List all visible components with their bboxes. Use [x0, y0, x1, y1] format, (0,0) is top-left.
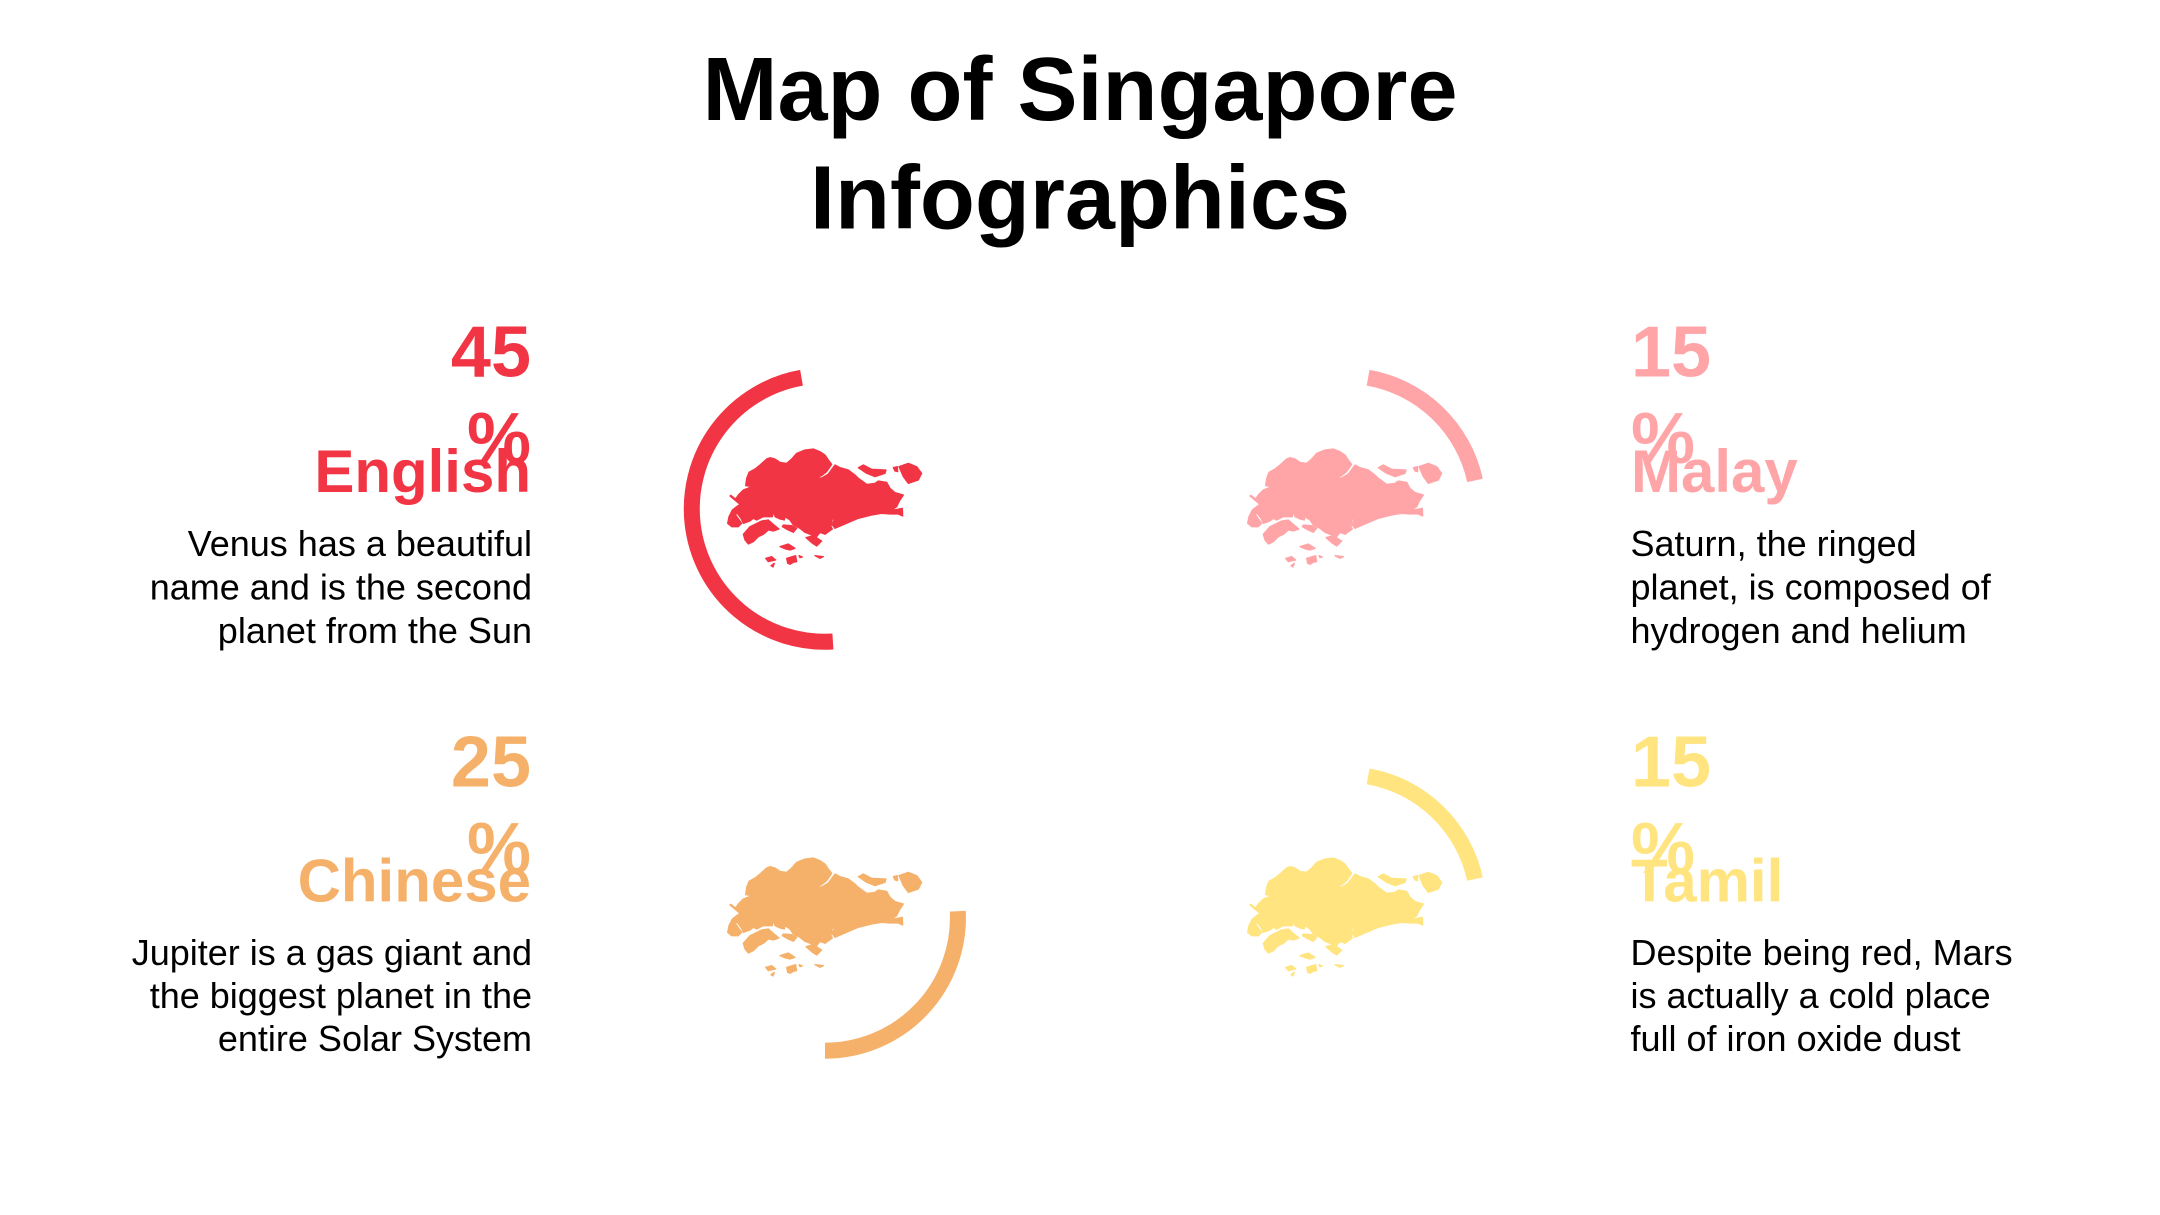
text block: English description: planet from the Sun	[218, 610, 532, 651]
text block: Tamil description	[1630, 932, 2013, 1059]
text block: English description	[150, 523, 532, 651]
text block: Malay description	[1630, 523, 1992, 651]
percentage: 45%	[451, 312, 531, 479]
text block: Chinese description	[132, 932, 532, 1059]
text block: Malay description: hydrogen and helium	[1630, 610, 1967, 651]
title	[702, 40, 1458, 248]
arc: 45 percent	[692, 378, 833, 642]
panel: Chinese	[132, 722, 958, 1059]
text block: English description: Venus has a beautiful	[188, 523, 532, 564]
arc: 15 percent Tamil	[1368, 776, 1475, 879]
heading: English: English	[314, 438, 531, 505]
panel: English	[150, 312, 922, 651]
heading: Malay: Malay	[1631, 438, 1798, 505]
arc: 15 percent Malay	[1368, 378, 1475, 480]
heading: Chinese: Chinese	[298, 848, 531, 914]
text block: Tamil description: full of iron oxide dust	[1630, 1018, 1961, 1059]
text block: English description: name and is the second	[150, 566, 532, 608]
text block: Malay description: Saturn, the ringed	[1630, 523, 1917, 564]
text block: Chinese description: the biggest planet in the	[150, 975, 532, 1016]
text block: Chinese description: entire Solar System	[218, 1018, 532, 1059]
percentage: 15% Malay	[1631, 312, 1711, 479]
text block: Tamil description: Despite being red, Mars	[1630, 932, 2013, 973]
map: Singapore pink	[1248, 449, 1442, 567]
percentage: 25%: %	[467, 809, 531, 889]
percentage: 25%: 25	[451, 722, 531, 802]
text block: Tamil description: is actually a cold place	[1630, 975, 1991, 1016]
heading: Tamil: Tamil	[1631, 848, 1783, 914]
percentage: 15% Malay: %	[1631, 399, 1695, 479]
title: Infographics	[810, 148, 1350, 248]
map: Singapore orange	[728, 858, 922, 976]
title: Map of Singapore	[702, 40, 1458, 140]
percentage: 15% Malay: 15	[1631, 312, 1711, 392]
percentage: 15% Tamil: %	[1631, 809, 1695, 889]
panel: Tamil	[1248, 722, 2013, 1059]
percentage: 45%: 45	[451, 312, 531, 392]
panel: Malay	[1248, 312, 1992, 651]
arc: 25 percent	[825, 911, 958, 1051]
percentage: 25%	[451, 722, 531, 889]
text block: Malay description: planet, is composed of	[1630, 566, 1992, 608]
map: Singapore red	[728, 449, 922, 567]
percentage: 15% Tamil: 15	[1631, 722, 1711, 802]
percentage: 45%: %	[467, 399, 531, 479]
text block: Chinese description: Jupiter is a gas giant and	[132, 932, 532, 973]
map: Singapore yellow	[1248, 858, 1442, 976]
percentage: 15% Tamil	[1631, 722, 1711, 889]
